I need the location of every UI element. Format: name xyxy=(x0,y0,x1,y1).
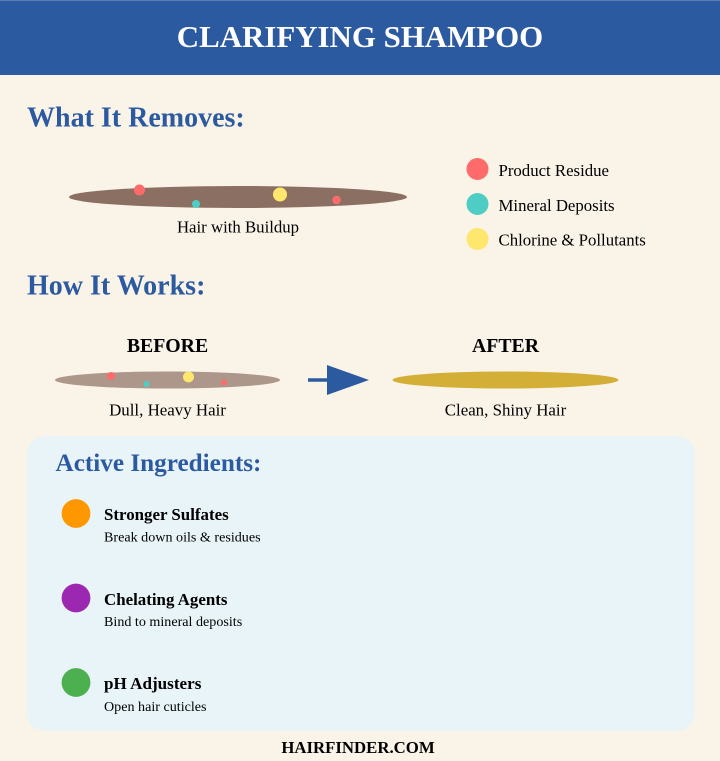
legend: Product Residue xyxy=(498,161,609,180)
caption: hair with buildup: Hair with Buildup xyxy=(177,218,299,236)
caption: clean, shiny hair: Clean, Shiny Hair xyxy=(445,400,567,420)
after hair xyxy=(392,335,618,420)
hair with buildup diagram xyxy=(69,184,407,236)
panel: active ingredients xyxy=(27,436,695,731)
label: before: BEFORE xyxy=(127,335,208,357)
ingredient: stronger sulfates: Stronger Sulfates xyxy=(104,505,229,524)
ingredient: chelating agents: Bind to mineral deposits xyxy=(104,614,242,630)
caption: dull, heavy hair: Dull, Heavy Hair xyxy=(109,400,226,420)
footer credit: HAIRFINDER.COM xyxy=(281,738,435,757)
header banner xyxy=(0,0,720,75)
title: CLARIFYING SHAMPOO xyxy=(177,19,543,54)
ingredient: chelating agents: Chelating Agents xyxy=(104,590,228,609)
arrow xyxy=(308,365,369,395)
ingredient: stronger sulfates xyxy=(62,499,261,546)
legend xyxy=(466,158,646,250)
legend: Mineral Deposits xyxy=(498,196,615,215)
legend: Chlorine & Pollutants xyxy=(498,230,646,250)
ingredient: pH adjusters: Open hair cuticles xyxy=(104,699,207,715)
ingredient: pH adjusters: pH Adjusters xyxy=(104,674,202,693)
heading: how it works: How It Works: xyxy=(27,270,205,302)
before hair xyxy=(55,335,280,420)
heading: what it removes: What It Removes: xyxy=(27,102,245,134)
ingredient: pH adjusters xyxy=(62,668,207,715)
label: after: AFTER xyxy=(472,335,540,357)
ingredient: chelating agents xyxy=(62,584,242,630)
heading: active ingredients: Active Ingredients: xyxy=(56,450,261,477)
ingredient: stronger sulfates: Break down oils & residues xyxy=(104,530,261,546)
